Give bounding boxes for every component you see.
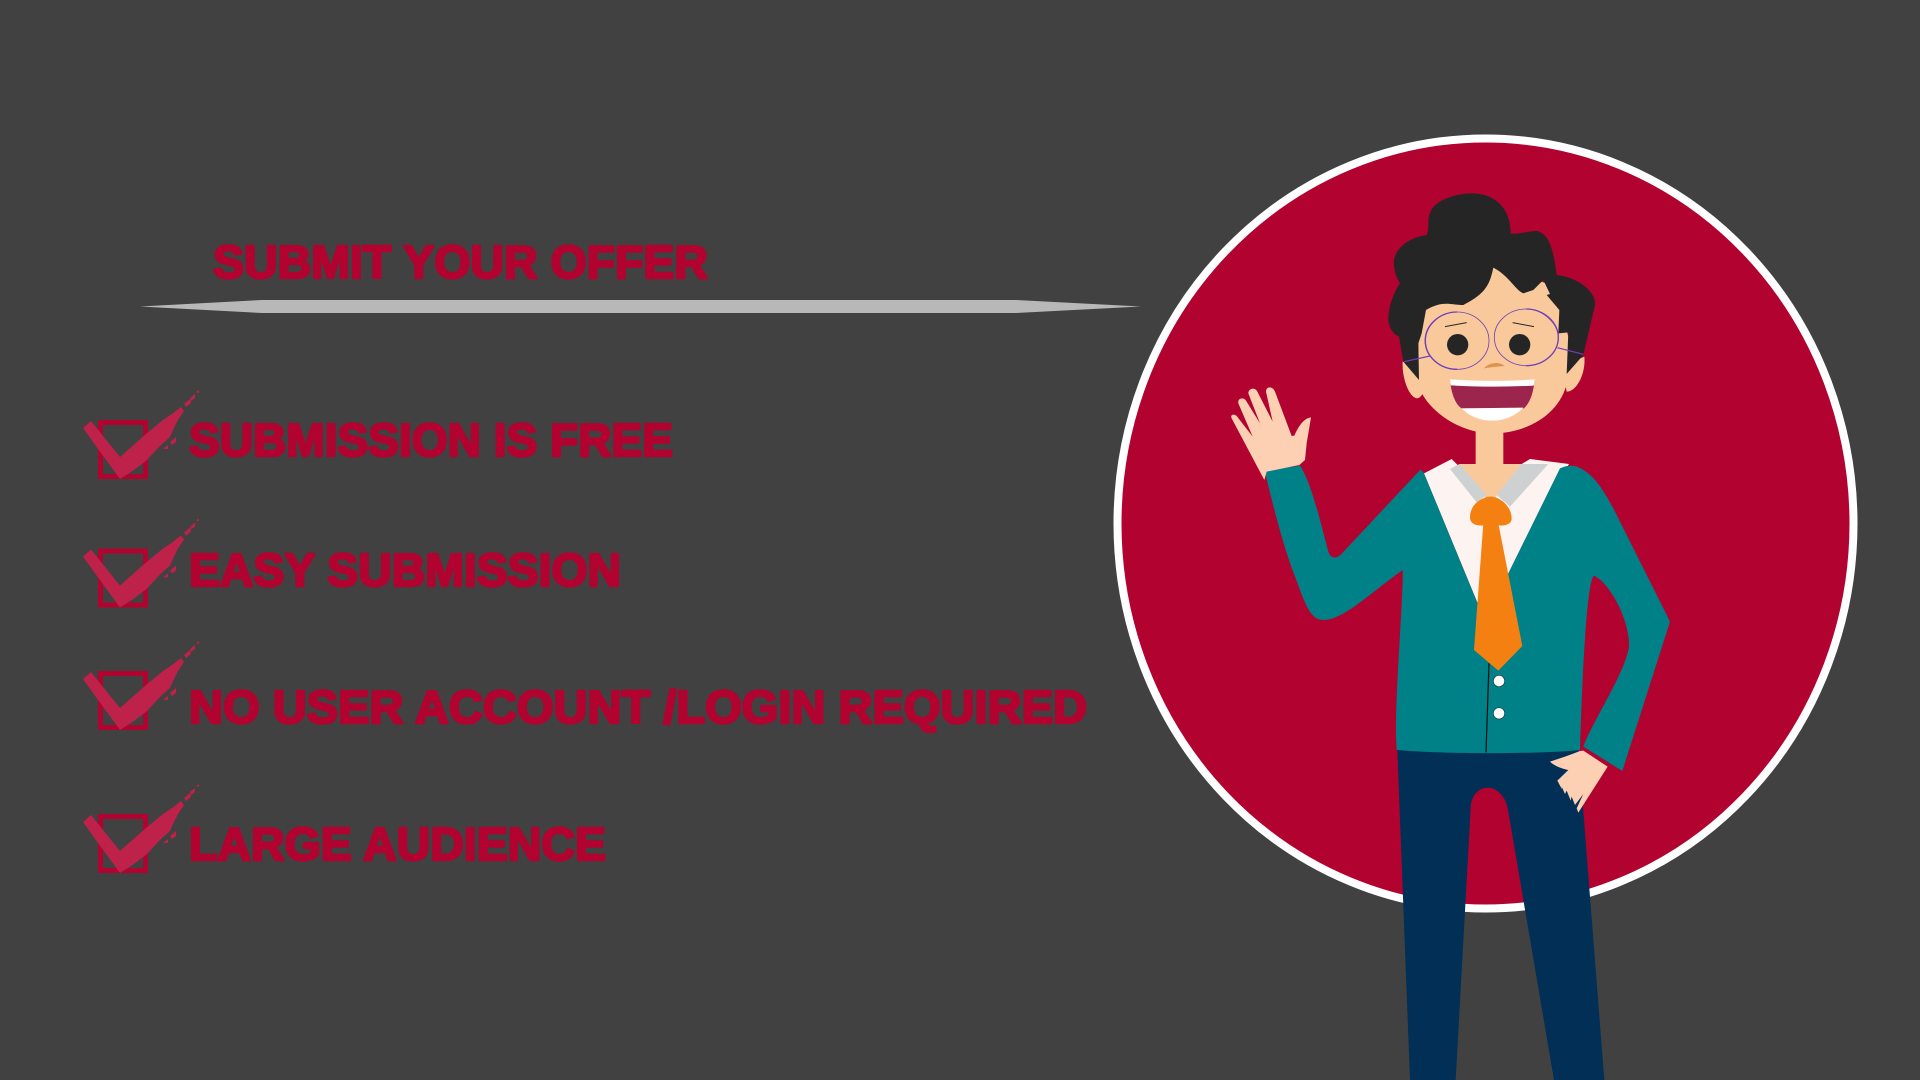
red circle backdrop — [1118, 138, 1854, 908]
eyes — [1447, 334, 1468, 355]
mouth — [1451, 385, 1534, 408]
title underline bar — [140, 300, 1141, 313]
title: SUBMIT YOUR OFFER — [213, 236, 708, 288]
jacket — [1266, 465, 1670, 771]
right ear — [1562, 357, 1585, 392]
eyebrows — [1445, 323, 1534, 327]
upper teeth — [1450, 379, 1535, 387]
checklist item: submission is free — [83, 390, 673, 479]
trousers — [1397, 750, 1604, 1080]
nose — [1484, 363, 1505, 368]
label: no user account: NO USER ACCOUNT /LOGIN REQUIRED — [189, 681, 1087, 733]
lower teeth — [1462, 408, 1523, 421]
raised hand — [1231, 387, 1311, 480]
icon: checkbox tick — [83, 641, 199, 730]
shirt collar — [1424, 459, 1569, 605]
glasses — [1404, 309, 1583, 369]
label: easy submission: EASY SUBMISSION — [189, 544, 621, 596]
checklist item: no user account — [83, 641, 1087, 733]
icon: checkbox tick — [83, 390, 199, 479]
necktie — [1474, 523, 1522, 671]
hand on hip — [1550, 751, 1608, 813]
icon: checkbox tick — [83, 784, 199, 873]
jacket buttons — [1493, 675, 1505, 719]
label: large audience: LARGE AUDIENCE — [189, 818, 606, 870]
label: submission is free: SUBMISSION IS FREE — [189, 414, 673, 466]
hair — [1388, 193, 1595, 380]
jacket placket — [1486, 663, 1489, 752]
torso and arms — [1266, 423, 1670, 813]
head — [1231, 193, 1595, 480]
collar shading — [1450, 464, 1548, 507]
icon: checkbox tick — [83, 518, 199, 608]
chest and neck — [1459, 423, 1522, 507]
face — [1418, 267, 1568, 433]
character: waving man — [1231, 193, 1670, 1080]
tie knot — [1470, 497, 1512, 526]
checklist item: easy submission — [83, 518, 621, 608]
checklist item: large audience — [83, 784, 606, 873]
left ear — [1403, 362, 1427, 398]
